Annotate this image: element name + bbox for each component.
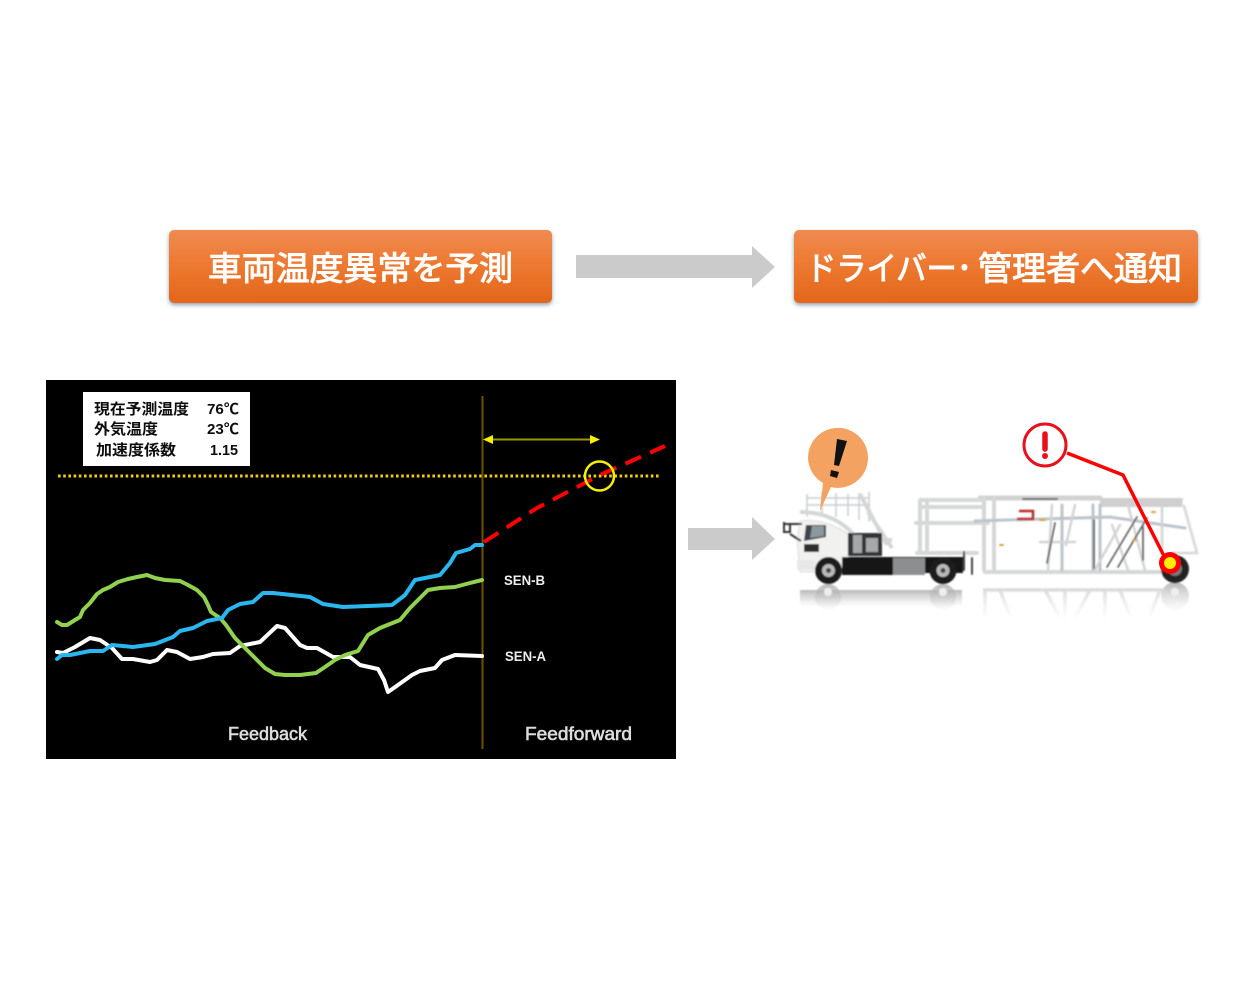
label: SEN-A: SEN-A — [505, 649, 546, 664]
series: white SEN-A — [57, 626, 482, 692]
icon: red alert circle with leader to wheel — [1024, 424, 1181, 574]
readout box: 76℃ — [207, 401, 239, 418]
truck illustration — [783, 492, 1197, 584]
readout box: 外気温度 — [94, 420, 158, 438]
series: green SEN-B — [57, 575, 482, 675]
truck reflection — [800, 582, 1189, 618]
panel: temperature chart — [46, 380, 676, 759]
icon: orange speech bubble with exclamation — [808, 428, 868, 511]
button: notify driver and manager — [794, 230, 1198, 303]
button: predict abnormal vehicle temperature: 車両温度異常を予測 — [208, 250, 513, 287]
label: SEN-B: SEN-B — [504, 573, 545, 588]
tractor unit — [783, 492, 963, 584]
readout box: 現在予測温度 — [94, 400, 189, 418]
readout box: 1.15 — [210, 442, 238, 459]
label: Feedforward: Feedforward — [525, 724, 632, 744]
readout box: 23℃ — [207, 421, 239, 438]
threshold crossing circle — [585, 462, 614, 490]
trailer frame — [916, 498, 1197, 574]
lead time double arrow — [483, 435, 600, 444]
rear wheel — [1161, 555, 1189, 583]
button: notify driver and manager: 管理者へ通知 — [978, 250, 1182, 287]
readout box — [83, 392, 250, 466]
readout box: 加速度係数 — [96, 441, 176, 459]
label: Feedback: Feedback — [228, 724, 308, 744]
divider between feedback and feedforward — [482, 396, 484, 749]
hot spot on wheel — [1159, 552, 1181, 574]
forecast dashed line — [484, 446, 665, 542]
threshold dotted line — [58, 474, 660, 478]
series: blue measured temperature — [57, 545, 482, 659]
arrow: chart to truck — [688, 517, 775, 560]
button: notify driver and manager: ドライバー･ — [806, 250, 972, 287]
arrow: prediction to notification — [576, 246, 775, 288]
button: predict abnormal vehicle temperature — [169, 230, 552, 303]
